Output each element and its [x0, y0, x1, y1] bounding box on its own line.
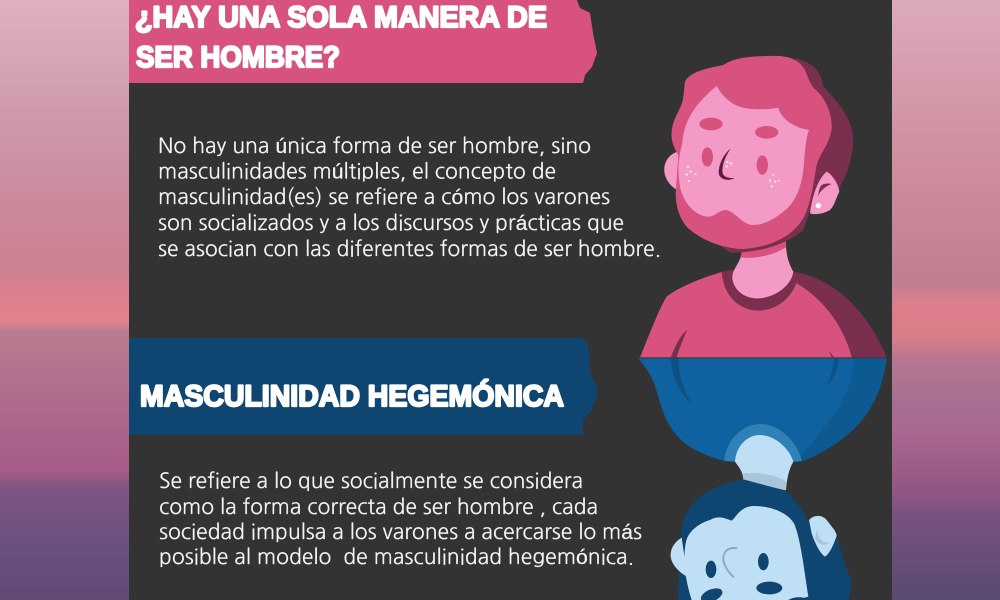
left ear [671, 538, 687, 577]
neck [735, 435, 793, 490]
background: right sunset strip [891, 0, 1000, 600]
illustration: blue man (mirrored) [638, 358, 887, 600]
text block: no hay una sola forma: son socializados y a los discursos y prácticas que [158, 212, 624, 233]
heading banner: pink: ¿HAY UNA SOLA MANERA DE [135, 1, 547, 34]
dark central panel [129, 0, 892, 600]
collar [722, 270, 798, 311]
nose [723, 548, 737, 577]
right ear [809, 516, 837, 557]
neck [732, 243, 793, 298]
face [684, 506, 808, 600]
text block: masculinidad hegemonica: Se refiere a lo que socialmente se considera [159, 470, 583, 491]
eyes and brows [699, 553, 808, 600]
shirt [640, 272, 852, 357]
left ear [664, 152, 678, 190]
shirt shoulder shadow [790, 272, 887, 357]
ear detail [818, 184, 832, 197]
text block: no hay una sola forma: masculinidad(es) se refiere a cómo los varones [158, 186, 610, 207]
text block: no hay una sola forma: No hay una única forma de ser hombre, sino [158, 135, 591, 156]
text block: masculinidad hegemonica: sociedad impulsa a los varones a acercarse lo más [159, 521, 642, 542]
neck shadow [741, 240, 786, 258]
hair back shadow [717, 58, 853, 253]
fold left [671, 358, 692, 405]
heading banner: pink: SER HOMBRE? [136, 41, 340, 74]
illustration: pink man [640, 56, 887, 357]
brows and cheeks [699, 118, 778, 175]
hair and beard [671, 56, 832, 249]
heading banner: blue [129, 338, 598, 435]
hair [678, 479, 852, 600]
shirt [638, 358, 887, 462]
text block: no hay una sola forma: masculinidades múltiples, el concepto de [158, 160, 556, 182]
shirt right shadow [798, 358, 887, 462]
text block: masculinidad hegemonica [159, 470, 642, 567]
heading banner: pink [129, 0, 597, 83]
face [678, 86, 809, 225]
text block: no hay una sola forma [158, 135, 661, 259]
fold right [825, 358, 838, 387]
nose [719, 149, 734, 180]
text block: masculinidad hegemonica: como la forma correcta de ser hombre , cada [159, 496, 598, 517]
sleeve fold left [671, 330, 687, 357]
earring [816, 203, 821, 208]
text block: masculinidad hegemonica: posible al modelo de masculinidad hegemónica. [159, 546, 634, 567]
sleeve fold right [828, 350, 834, 357]
collar [724, 424, 802, 462]
text block: no hay una sola forma: se asocian con las diferentes formas de ser hombre. [158, 238, 661, 259]
freckles [686, 161, 780, 187]
right ear [810, 172, 839, 214]
ear detail [815, 530, 830, 545]
heading banner: blue: MASCULINIDAD HEGEMÓNICA [140, 379, 564, 413]
background: left sunset strip [0, 0, 130, 600]
neck shadow [743, 473, 787, 490]
